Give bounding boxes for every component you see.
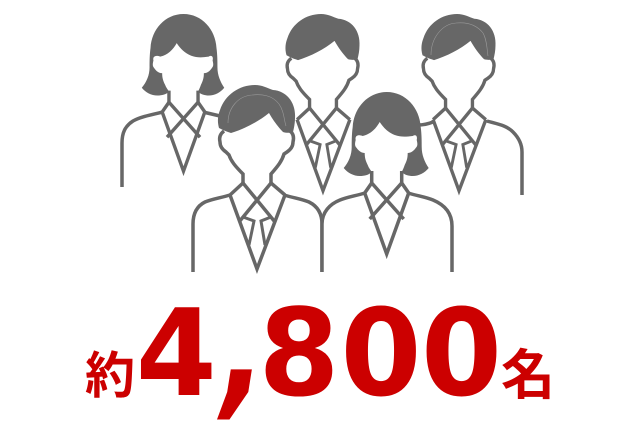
icon: man front left [193,85,322,272]
prefix: 約: 約 [85,348,135,404]
headcount figure [85,258,555,424]
number: 4,800: 4800 [136,283,502,423]
icon: man back center [285,14,360,192]
suffix: 名: 名 [501,346,555,406]
icon: woman front center [322,92,452,272]
icon: man back right [418,14,522,195]
icon: woman back left [122,14,224,187]
people group icon [122,14,522,272]
